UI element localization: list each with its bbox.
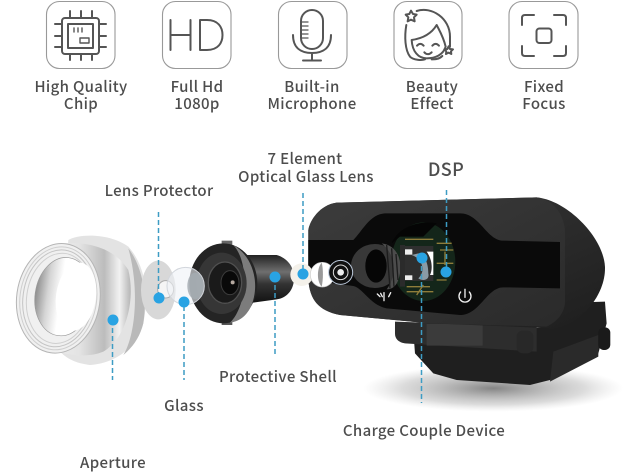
lens protector disc (141, 261, 176, 319)
camera body (308, 197, 605, 328)
label: Fixed Focus: Focus (522, 93, 566, 114)
icon: power (459, 289, 471, 302)
label: DSP: DSP (428, 156, 464, 182)
label: Beauty Effect: Effect (410, 93, 454, 114)
webcam (308, 197, 623, 412)
label: High Quality Chip: High Quality (34, 76, 128, 97)
small lens elements (290, 260, 353, 287)
label: 7 Element Optical Glass Lens: 7 Element (268, 148, 342, 169)
icon: high quality chip (46, 2, 115, 68)
icon: fixed focus (509, 2, 578, 68)
label: Full Hd 1080p: 1080p (174, 93, 220, 114)
label: 7 Element Optical Glass Lens: Optical Glass Lens (238, 166, 374, 187)
circuit board (391, 222, 455, 301)
label: Beauty Effect: Beauty (406, 76, 458, 97)
marker dots (108, 252, 452, 326)
label: Lens Protector: Lens Protector (105, 180, 214, 201)
label: Protective Shell: Protective Shell (219, 366, 337, 387)
label: Built-in Microphone: Built-in (284, 76, 340, 97)
icon: HD (162, 2, 231, 68)
aperture ring (9, 236, 146, 365)
label: Aperture: Aperture (80, 452, 146, 473)
lens barrel (189, 241, 294, 325)
label: Fixed Focus: Fixed (524, 76, 564, 97)
clip mount (395, 302, 610, 385)
label: Glass: Glass (164, 395, 204, 416)
label: Built-in Microphone: Microphone (267, 93, 357, 114)
ground shadow (363, 365, 623, 412)
label: Full Hd 1080p: Full Hd (171, 76, 223, 97)
leader lines (112, 190, 446, 403)
icon: beauty face (394, 2, 462, 68)
glass element (167, 267, 204, 305)
rear lens with knurled ring (351, 243, 405, 289)
label: High Quality Chip: Chip (64, 93, 98, 114)
icon: mic signal (377, 293, 391, 301)
icon: microphone (278, 2, 347, 68)
black front band (308, 213, 560, 315)
label: Charge Couple Device: Charge Couple Device (343, 420, 505, 441)
